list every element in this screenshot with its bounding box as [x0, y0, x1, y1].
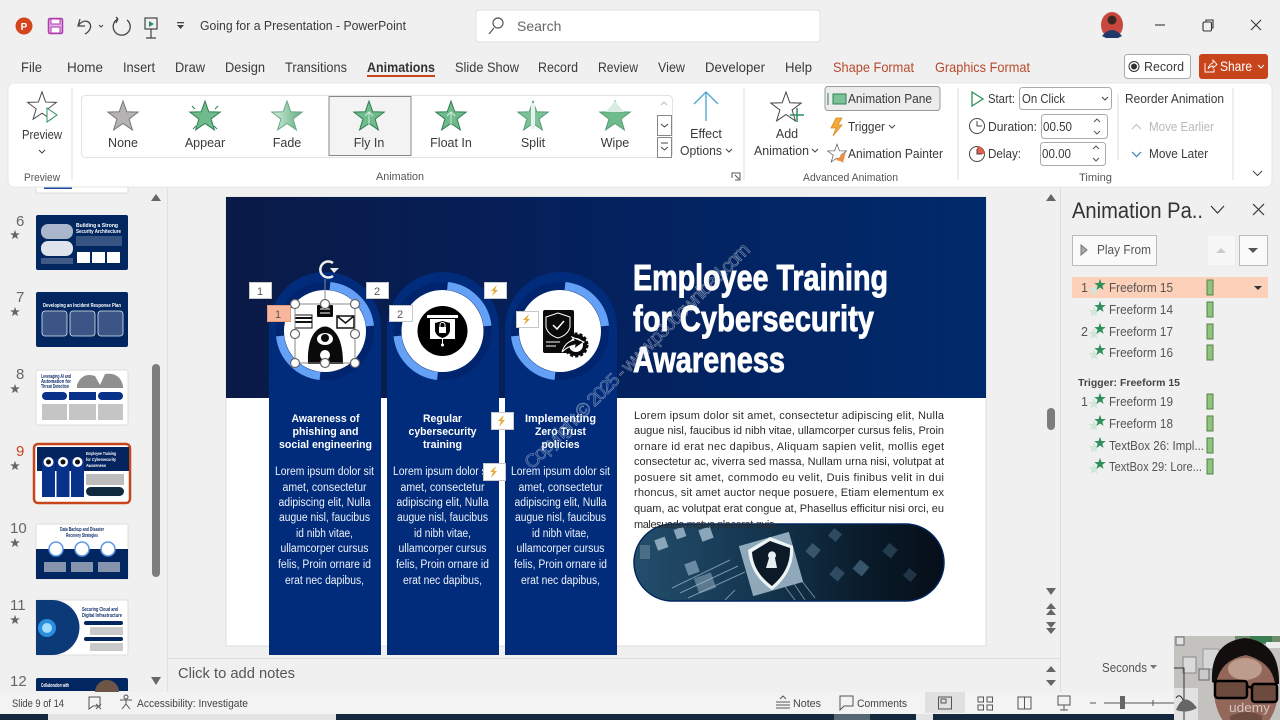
- thumbnail: slide 11: 11: [10, 597, 26, 614]
- animation tag 2: 2: [374, 286, 380, 298]
- column: zero trust: [505, 272, 617, 655]
- thumbnail: slide 9 selected: for Cybersecurity: [86, 457, 116, 462]
- icon: hacker with mail and skull: [295, 305, 354, 364]
- icon: presentation start: [145, 18, 157, 38]
- animation tag 1: 1: [257, 286, 263, 298]
- body paragraph: quam, ac volutpat erat congue at, Phasellus efficitur nisi orci, eu: [634, 503, 944, 515]
- row: Freeform 14: Freeform 14: [1109, 303, 1173, 317]
- watermark: Copyright © 2025 - www.p30download.com: [521, 239, 755, 474]
- thumbnail: slide 10: Recovery Strategies: [66, 533, 98, 539]
- delay: [970, 142, 1106, 166]
- body text: felis, Proin ornare id: [396, 559, 489, 571]
- body text: [511, 466, 611, 587]
- slide scroll controls: [1046, 188, 1060, 692]
- animation tag 2: [366, 282, 388, 298]
- heading: training: [423, 439, 462, 451]
- udemy watermark: udemy: [1229, 700, 1271, 715]
- animation: Fade: [272, 101, 302, 150]
- ring graphic: [280, 286, 370, 376]
- record button: [1124, 54, 1190, 78]
- zoom slider: [1090, 696, 1174, 709]
- selection handles: [290, 262, 360, 368]
- thumbnail: slide 6: 6: [16, 213, 24, 230]
- ribbon tabs: Home: [67, 59, 103, 75]
- ribbon tabs: Draw: [175, 59, 206, 75]
- icon: rotate handle: [320, 262, 339, 278]
- row: Freeform 19: [1081, 393, 1213, 409]
- icon: PowerPoint logo: P: [21, 22, 28, 33]
- search box: [476, 10, 820, 42]
- seconds dropdown: Seconds: [1102, 661, 1147, 675]
- ribbon tabs: Design: [225, 59, 265, 75]
- taskbar strip: [0, 714, 1280, 720]
- icon: preview star: [28, 92, 56, 119]
- body paragraph: ornare id erat nec dapibus, Aliquam sapien velit, mollis eget: [634, 441, 944, 453]
- heading: social engineering: [279, 439, 372, 451]
- notes bar: Click to add notes: [178, 665, 295, 682]
- trigger tag: second ring: [484, 282, 506, 298]
- animation pane: Animation Pa..: [1072, 198, 1203, 223]
- add animation: [754, 92, 818, 158]
- ribbon panel: Advanced Animation: [803, 172, 898, 184]
- duration: 00.50: [1043, 120, 1072, 134]
- ribbon panel: Animation: [376, 171, 424, 183]
- animation tag 2 on second icon: [390, 306, 412, 322]
- document title: Going for a Presentation - PowerPoint: [200, 18, 406, 33]
- body text: felis, Proin ornare id: [278, 559, 371, 571]
- view buttons: [925, 692, 1070, 713]
- status bar: Slide 9 of 14: [12, 698, 64, 710]
- start: On Click: [1022, 92, 1066, 106]
- animation: Fade: Fade: [273, 136, 301, 150]
- animation: Split: [518, 101, 548, 150]
- body text: ullamcorper cursus: [280, 543, 369, 555]
- slide title: for Cybersecurity: [633, 298, 874, 339]
- animation: None: [108, 101, 138, 150]
- animation: Appear: [185, 101, 225, 150]
- move later: Move Later: [1149, 147, 1208, 161]
- animation gallery: [82, 96, 672, 158]
- row: Freeform 18: Freeform 18: [1109, 417, 1173, 431]
- body text: ullamcorper cursus: [398, 543, 487, 555]
- icon: PowerPoint logo: [16, 18, 32, 34]
- row: Freeform 17: 2: [1081, 325, 1088, 339]
- body text: augue nisl, faucibus: [515, 512, 606, 524]
- thumbnail: slide 11: Securing Cloud and: [82, 607, 118, 613]
- body paragraph: rhoncus, sit amet auctor neque posuere, Etiam elementum ex: [634, 487, 944, 499]
- row: Freeform 15: [1081, 279, 1213, 295]
- heading: Regular: [423, 413, 463, 425]
- body text: felis, Proin ornare id: [514, 559, 607, 571]
- share button: Share: [1220, 58, 1252, 74]
- row: Freeform 19: 1: [1081, 395, 1088, 409]
- row: Freeform 17: [1081, 323, 1213, 339]
- body text: amet, consectetur: [282, 482, 367, 494]
- thumbnail: slide 10: [10, 520, 128, 579]
- animation: Float In: [430, 101, 472, 150]
- animation pane button: Animation Pane: [848, 92, 932, 106]
- slide title: [633, 257, 888, 380]
- ribbon tabs: View: [658, 59, 686, 75]
- ribbon tabs: Animations: [367, 59, 435, 75]
- animation: None: None: [108, 136, 138, 150]
- body text: [275, 466, 375, 587]
- effect options: Effect: [690, 127, 722, 141]
- heading: [279, 413, 372, 451]
- body text: Lorem ipsum dolor sit: [275, 466, 375, 478]
- thumbnail: slide 9 selected: [10, 443, 130, 503]
- duration: [970, 114, 1108, 138]
- play from button: [1072, 236, 1156, 266]
- slide thumbnail panel: [10, 180, 168, 704]
- animation list: [1078, 279, 1213, 474]
- delay: 00.00: [1042, 147, 1071, 161]
- body text: id nibh vitae,: [532, 528, 589, 540]
- body text: Lorem ipsum dolor sit: [393, 466, 493, 478]
- icon: policy document with shield and gear: [543, 310, 587, 356]
- row: Freeform 15: Freeform 15: [1109, 281, 1173, 295]
- heading: Implementing: [525, 413, 596, 425]
- body text: adipiscing elit, Nulla: [514, 497, 607, 509]
- body text: erat nec dapibus,: [403, 575, 482, 587]
- body text: augue nisl, faucibus: [397, 512, 488, 524]
- body text: augue nisl, faucibus: [279, 512, 370, 524]
- thumbnail: slide 11: [10, 597, 128, 655]
- ribbon tabs: Insert: [123, 59, 155, 75]
- ribbon tabs: Slide Show: [455, 59, 520, 75]
- slide title: Awareness: [633, 339, 785, 380]
- heading: Zero Trust: [535, 426, 586, 438]
- body text: amet, consectetur: [400, 482, 485, 494]
- thumbnail: slide 9 selected: Awareness: [86, 463, 106, 468]
- row: Freeform 14: [1088, 301, 1213, 317]
- body paragraph: augue nisl, faucibus id nibh vitae, ullamcorper cursus felis, Proin: [634, 425, 944, 437]
- trigger tag: third icon: [516, 312, 538, 328]
- notes bar: [168, 658, 1060, 686]
- thumbnail: slide 6: Building a Strong: [76, 223, 118, 229]
- slide image: security chip pill: [634, 524, 944, 601]
- row: Freeform 16: [1088, 344, 1213, 360]
- move earlier: Move Earlier: [1149, 120, 1214, 134]
- delay: Delay:: [988, 147, 1021, 161]
- animation tag 1: [250, 282, 272, 298]
- body paragraph: Lorem ipsum dolor sit amet, consectetur adipiscing elit, Nulla: [634, 410, 945, 422]
- body text: id nibh vitae,: [414, 528, 471, 540]
- heading: policies: [542, 439, 580, 451]
- effect options: [680, 92, 732, 158]
- icon: undo: [78, 19, 103, 34]
- thumbnail scrollbar: [151, 194, 161, 685]
- share button: [1199, 54, 1268, 79]
- start: [972, 88, 1112, 110]
- ribbon tabs: Developer: [705, 59, 765, 75]
- accessibility status: [120, 695, 248, 710]
- icon: customize toolbar: [177, 22, 184, 29]
- ribbon tabs: Graphics Format: [935, 59, 1030, 75]
- icon: save: [48, 18, 62, 34]
- body paragraph: malesuada metus placerat quis.: [634, 519, 777, 531]
- slide header band: [226, 197, 986, 398]
- move up and down buttons: [1208, 236, 1268, 266]
- webcam presenter overlay: [1174, 636, 1280, 720]
- body paragraph: consectetur ac, viverra sed massa, Nullam urna nisi, volutpat at: [634, 456, 944, 468]
- add animation: Animation: [754, 144, 809, 158]
- thumbnail: slide 8: Threat Detection: [41, 384, 69, 390]
- thumbnail: slide 6: Security Architecture: [76, 229, 121, 235]
- thumbnail: slide 9 selected: Employee Training: [86, 451, 116, 456]
- icon: redo: [113, 17, 130, 35]
- thumbnail: slide 7: 7: [16, 289, 24, 306]
- notes button: Notes: [793, 698, 821, 710]
- animation tag 1 selected: [268, 306, 290, 322]
- heading: [525, 413, 596, 451]
- thumbnail: slide 10: Data Backup and Disaster: [60, 527, 104, 533]
- thumbnail: slide 8: Leveraging AI and: [41, 374, 71, 380]
- animation tag 1 selected: 1: [275, 309, 281, 321]
- animation tag 2 on second icon: 2: [397, 309, 403, 321]
- heading: Awareness of: [292, 413, 360, 425]
- add animation: Add: [776, 127, 798, 141]
- search box: Search: [517, 18, 561, 34]
- ribbon panel: [8, 83, 1272, 187]
- icon: dialog launcher: [732, 173, 740, 180]
- icon: security training screen: [418, 306, 468, 356]
- preview group: Preview: [22, 128, 63, 142]
- thumbnail: slide 12: [10, 673, 128, 704]
- thumbnail: slide 8: 8: [16, 366, 24, 383]
- body text: erat nec dapibus,: [521, 575, 600, 587]
- preview group: Preview: [24, 172, 60, 184]
- body text: amet, consectetur: [518, 482, 603, 494]
- status bar: [0, 692, 1280, 714]
- slide canvas: [226, 197, 986, 655]
- row: Freeform 19: Freeform 19: [1109, 395, 1173, 409]
- icon: spell check: [89, 697, 101, 709]
- gallery scroll buttons: [658, 102, 672, 158]
- row: Freeform 17: Freeform 17: [1109, 325, 1173, 339]
- row: TextBox 29: TextBox 29: Lore...: [1109, 460, 1202, 474]
- animation: Fly In: [354, 101, 384, 150]
- preview group: [22, 92, 63, 184]
- animation painter: Animation Painter: [848, 147, 943, 161]
- ribbon tabs: [21, 59, 1030, 77]
- animation: Split: Split: [521, 136, 546, 150]
- trigger heading: Trigger: Freeform 15: [1078, 377, 1180, 389]
- timing controls: Reorder Animation: [1125, 92, 1224, 106]
- ring graphic: [515, 286, 605, 376]
- presenter head: [1212, 638, 1279, 720]
- comments button: Comments: [857, 698, 907, 710]
- thumbnail: slide 6: [10, 213, 128, 270]
- body paragraph: [634, 410, 945, 531]
- animation painter: [828, 144, 943, 162]
- animation: Wipe: [600, 101, 630, 150]
- animation: Wipe: Wipe: [601, 136, 629, 150]
- thumbnail: slide 12: 12: [10, 673, 27, 690]
- start: Start:: [988, 92, 1015, 106]
- ribbon tabs: File: [21, 59, 42, 75]
- thumbnail: slide 7: [10, 289, 128, 347]
- record button: Record: [1144, 59, 1184, 74]
- ribbon tabs: Transitions: [285, 59, 347, 75]
- duration: Duration:: [988, 120, 1037, 134]
- slide title: Employee Training: [633, 257, 888, 298]
- notes button: [776, 696, 821, 710]
- ribbon tabs: Shape Format: [833, 59, 914, 75]
- selected row highlight: [1072, 277, 1268, 298]
- accessibility status: Accessibility: Investigate: [137, 698, 248, 710]
- animation pane: [1072, 198, 1268, 675]
- thumbnail: slide 11: Digital Infrastructure: [82, 613, 122, 619]
- timing controls: [970, 88, 1224, 166]
- ribbon tabs: Record: [538, 59, 578, 75]
- body text: erat nec dapibus,: [285, 575, 364, 587]
- pane controls: [1211, 204, 1264, 215]
- thumbnail: slide 12: Collaboration with: [41, 683, 69, 689]
- trigger: Trigger: [848, 120, 885, 134]
- icon: user avatar: [1101, 12, 1123, 38]
- effect options: Options: [680, 144, 722, 158]
- ribbon panel: Timing: [1079, 172, 1112, 184]
- body text: Lorem ipsum dolor sit: [511, 466, 611, 478]
- title bar: [16, 10, 1261, 42]
- row: Freeform 16: Freeform 16: [1109, 346, 1173, 360]
- body text: id nibh vitae,: [296, 528, 353, 540]
- column: regular training: [387, 272, 499, 655]
- animation: Float In: Float In: [430, 136, 472, 150]
- heading: cybersecurity: [408, 426, 477, 438]
- thumbnail: slide 9 selected: 9: [16, 443, 24, 460]
- animation pane button: [825, 86, 940, 110]
- body text: ullamcorper cursus: [516, 543, 605, 555]
- body text: adipiscing elit, Nulla: [278, 497, 371, 509]
- row: TextBox 26: TextBox 26: Impl...: [1109, 439, 1204, 453]
- ribbon tabs: Help: [785, 59, 812, 75]
- comments button: [840, 696, 907, 710]
- play from button: Play From: [1097, 243, 1151, 257]
- row: Freeform 15: 1: [1081, 281, 1088, 295]
- thumbnail: slide 10: 10: [10, 520, 27, 537]
- body text: adipiscing elit, Nulla: [396, 497, 489, 509]
- trigger tag: third text: [484, 464, 506, 480]
- thumbnail: slide 8: Automation for: [41, 379, 71, 385]
- column: phishing awareness: [269, 272, 381, 655]
- animation: Fly In: Fly In: [354, 136, 384, 150]
- trigger tag: third heading: [492, 412, 514, 430]
- animation: Appear: Appear: [185, 136, 225, 150]
- thumbnail: slide 8: [10, 366, 128, 425]
- window controls: [1155, 20, 1261, 31]
- row: Freeform 18: [1088, 415, 1213, 431]
- body paragraph: posuere sit amet, commodo eu velit, Duis finibus velit in dui: [634, 472, 944, 484]
- heading: phishing and: [292, 426, 358, 438]
- body text: [393, 466, 493, 587]
- trigger: [831, 118, 895, 136]
- thumbnail: slide 7: Developing an Incident Response Plan: [43, 303, 121, 309]
- ring graphic: [398, 286, 488, 376]
- heading: [408, 413, 477, 451]
- ribbon tabs: Review: [598, 59, 639, 75]
